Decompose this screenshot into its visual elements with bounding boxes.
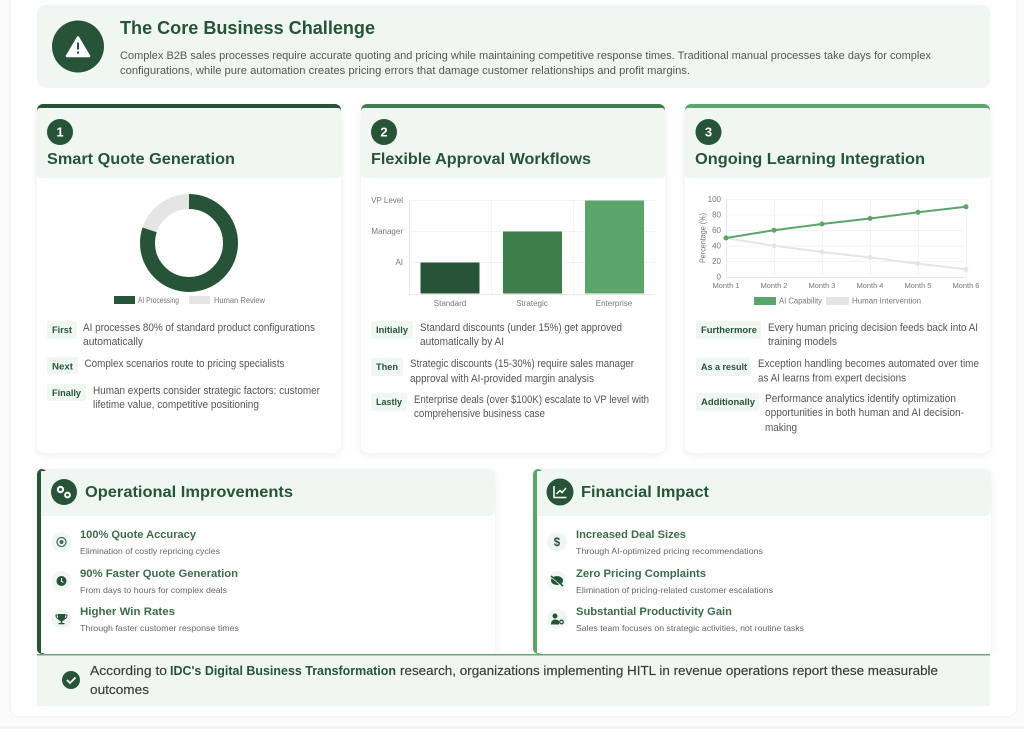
item: higher win rates [52, 606, 239, 633]
icon: warning [52, 20, 104, 72]
step: as a result: As a result [701, 362, 747, 372]
step number 1 [47, 119, 73, 145]
icon: gears [51, 479, 77, 505]
bar chart: approval levels: VP Level [371, 196, 403, 205]
step: first: AI processes 80% of standard product configurations [83, 322, 315, 334]
heading: financial impact: Financial Impact [581, 484, 709, 501]
step: as a result: Exception handling becomes automated over time [758, 358, 979, 370]
text: challenge description [120, 50, 932, 77]
step: furthermore: training models [768, 336, 837, 348]
step: initially [371, 321, 622, 348]
panel: step 2 flexible approval workflows [361, 104, 665, 453]
panel: core business challenge [37, 5, 990, 88]
item: higher win rates: Higher Win Rates [80, 606, 175, 618]
step: additionally: making [765, 422, 797, 434]
line chart: AI capability vs human intervention: Month 6 [953, 281, 979, 290]
step: additionally: opportunities in both human and AI decision- [765, 407, 964, 419]
step: additionally [696, 393, 964, 434]
line chart: AI capability vs human intervention: 60 [712, 226, 722, 235]
step: then: Strategic discounts (15-30%) require sales manager [410, 358, 634, 370]
step: additionally: Additionally [701, 397, 755, 407]
donut chart [114, 202, 265, 305]
item: zero pricing complaints: Zero Pricing Complaints [576, 568, 706, 580]
icon: user cog [547, 609, 567, 629]
bar chart: approval levels: Manager [371, 227, 403, 236]
panel: financial impact [533, 469, 991, 654]
heading: smart quote generation: Smart Quote Generation [47, 151, 235, 168]
line chart: AI capability vs human intervention: 20 [712, 257, 722, 266]
step: next: Next [52, 362, 73, 372]
line chart: AI capability vs human intervention [698, 195, 979, 306]
step: next [47, 357, 284, 374]
item: increased deal sizes [547, 529, 763, 556]
icon: target [52, 532, 72, 552]
step number 2 [371, 119, 397, 145]
icon: trophy [52, 609, 72, 629]
panel: operational improvements [37, 469, 495, 654]
text: callout message [90, 663, 938, 697]
text: challenge description: configurations, while pure automation creates pricing errors that damage customer relationships and profit margins. [120, 65, 690, 77]
step: finally: Human experts consider strategic factors: customer [93, 385, 320, 397]
step: initially: automatically by AI [420, 336, 504, 348]
bar chart: approval levels: AI [395, 258, 403, 267]
text: callout message: outcomes [90, 682, 149, 697]
step: furthermore: Furthermore [701, 325, 757, 335]
heading: operational improvements: Operational Improvements [85, 484, 293, 501]
item: quote accuracy: 100% Quote Accuracy [80, 529, 197, 541]
item: increased deal sizes: Through AI-optimized pricing recommendations [576, 546, 763, 556]
item: increased deal sizes: Increased Deal Sizes [576, 529, 686, 541]
item: substantial productivity gain [547, 606, 804, 633]
step: furthermore: Every human pricing decision feeds back into AI [768, 322, 978, 334]
step: additionally: Performance analytics identify optimization [765, 393, 956, 405]
text: challenge description: Complex B2B sales processes require accurate quoting and pricing while maintaining competitive response times. Traditional manual processes take days for complex [120, 50, 932, 62]
item: faster quote generation [52, 568, 238, 595]
heading: challenge: The Core Business Challenge [120, 17, 375, 38]
step: as a result [696, 358, 979, 384]
step: then: approval with AI-provided margin analysis [410, 373, 594, 385]
bar chart: approval levels: Enterprise [596, 299, 633, 308]
bar chart: approval levels [371, 196, 655, 308]
item: zero pricing complaints [547, 568, 773, 595]
step: furthermore [696, 321, 978, 348]
step: then: Then [376, 362, 398, 372]
item: higher win rates: Through faster customer response times [80, 623, 239, 633]
heading: ongoing learning integration: Ongoing Learning Integration [695, 151, 925, 168]
step number 3 [696, 119, 722, 145]
step: lastly: comprehensive business case [414, 408, 545, 420]
line chart: AI capability vs human intervention: 80 [712, 210, 722, 220]
item: quote accuracy: Elimination of costly repricing cycles [80, 546, 220, 556]
step number 3: 3 [705, 124, 712, 140]
donut chart: Human Review [214, 296, 265, 305]
icon: clock [52, 571, 72, 591]
icon: check [62, 671, 80, 689]
item: faster quote generation: 90% Faster Quote Generation [80, 568, 238, 580]
panel: step 1 smart quote generation [37, 104, 341, 453]
step: then [371, 358, 634, 385]
step: lastly: Lastly [376, 397, 402, 407]
line chart: AI capability vs human intervention: 40 [712, 242, 722, 250]
item: zero pricing complaints: Elimination of pricing-related customer escalations [576, 585, 773, 595]
panel: step 3 ongoing learning integration [685, 104, 990, 453]
step: finally: Finally [52, 388, 81, 398]
step: first [47, 321, 315, 348]
donut chart: AI Processing [138, 296, 179, 305]
icon: dollar [547, 532, 567, 552]
bar chart: approval levels: Strategic [516, 299, 548, 308]
step: next: Complex scenarios route to pricing specialists [84, 358, 284, 370]
line chart: AI capability vs human intervention: 100 [708, 195, 722, 204]
line chart: AI capability vs human intervention: Percentage (%) [698, 213, 708, 263]
icon: line chart [546, 478, 574, 506]
step number 1: 1 [56, 124, 64, 140]
line chart: AI capability vs human intervention: AI Capability [779, 296, 822, 306]
step number 2: 2 [380, 124, 388, 140]
bar chart: approval levels: Standard [434, 299, 466, 308]
callout: IDC research outcomes [37, 654, 990, 706]
line chart: AI capability vs human intervention: Month 1 [713, 281, 739, 290]
text: callout message: research, organizations implementing HITL in revenue operations report these measurable [400, 663, 938, 678]
step: lastly: Enterprise deals (over $100K) escalate to VP level with [414, 394, 649, 406]
item: quote accuracy [52, 529, 220, 556]
line chart: AI capability vs human intervention: Month 2 [761, 281, 787, 290]
line chart: AI capability vs human intervention: Month 3 [809, 281, 835, 290]
step: initially: Standard discounts (under 15%) get approved [420, 322, 622, 334]
line chart: AI capability vs human intervention: Month 4 [857, 281, 883, 290]
step: finally: lifetime value, competitive positioning [93, 399, 259, 411]
line chart: AI capability vs human intervention: Human Intervention [852, 296, 921, 306]
step: first: automatically [83, 336, 144, 348]
step: lastly [371, 393, 649, 420]
item: substantial productivity gain: Substantial Productivity Gain [576, 606, 732, 618]
icon: comment slash [547, 571, 567, 591]
text: callout message: IDC's Digital Business Transformation [170, 663, 396, 678]
text: callout message: According to [90, 663, 167, 678]
item: faster quote generation: From days to hours for complex deals [80, 585, 227, 595]
item: substantial productivity gain: Sales team focuses on strategic activities, not routine tasks [576, 623, 804, 633]
heading: flexible approval workflows: Flexible Approval Workflows [371, 151, 591, 168]
step: first: First [52, 325, 72, 335]
line chart: AI capability vs human intervention: Month 5 [905, 281, 931, 290]
line chart: AI capability vs human intervention: 0 [717, 272, 722, 282]
step: as a result: as AI learns from expert decisions [758, 372, 906, 384]
step: initially: Initially [376, 325, 408, 335]
icon: dollar: $ [554, 537, 561, 549]
step: finally [47, 384, 320, 411]
